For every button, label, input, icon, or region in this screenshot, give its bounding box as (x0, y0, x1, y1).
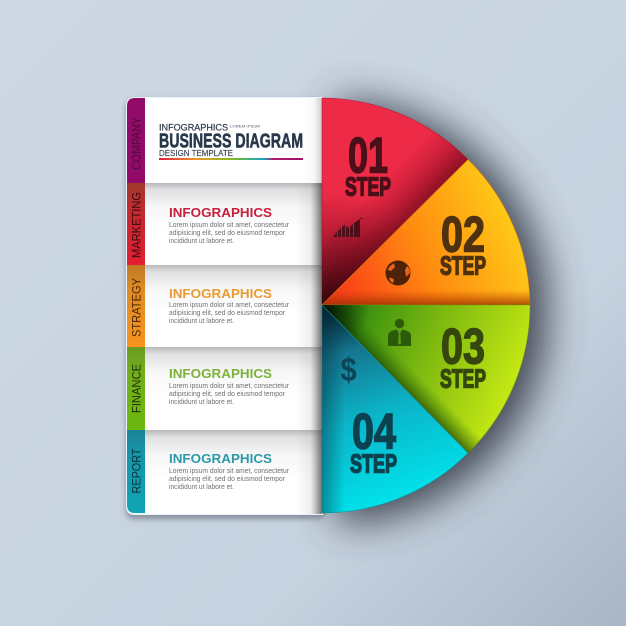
text: marketing block: adipisicing elit, sed do eiusmod tempor (169, 228, 286, 237)
label: 01 step: 01 (348, 128, 388, 184)
wedge: step 2 orange (322, 160, 530, 305)
text: report block: adipisicing elit, sed do eiusmod tempor (169, 474, 286, 483)
rainbow rule (159, 158, 303, 160)
label: 04 step: 04 (352, 404, 396, 460)
tab: company: COMPANY (130, 117, 144, 170)
label: 02 step (440, 206, 486, 280)
pie chart (322, 98, 530, 513)
tab: report: REPORT (130, 448, 144, 494)
panel frame (126, 97, 323, 515)
wedge: step 3 green (322, 305, 530, 453)
heading: infographics lorem ipsum: INFOGRAPHICS (159, 122, 228, 134)
text: strategy block (169, 286, 290, 325)
text: strategy block: incididunt ut labore et. (169, 316, 234, 325)
tab: marketing (127, 183, 145, 265)
label: 04 step: STEP (350, 448, 397, 478)
card: finance (127, 347, 322, 430)
wedge: step 1 red (322, 98, 468, 305)
text: report block: incididunt ut labore et. (169, 482, 234, 491)
wedge: step 4 cyan (322, 305, 468, 513)
label: 01 step: STEP (345, 172, 391, 202)
tab: marketing: MARKETING (130, 192, 144, 258)
card: report (127, 430, 322, 514)
text: finance block: incididunt ut labore et. (169, 397, 234, 406)
text: strategy block: adipisicing elit, sed do eiusmod tempor (169, 308, 286, 317)
tab: finance: FINANCE (130, 364, 144, 413)
text: marketing block: incididunt ut labore et. (169, 236, 234, 245)
label: 02 step: 02 (441, 206, 485, 262)
text: finance block: INFOGRAPHICS (169, 366, 272, 381)
label: 01 step (345, 128, 391, 202)
heading: business diagram: BUSINESS DIAGRAM (159, 130, 303, 152)
label: 04 step (350, 404, 397, 478)
text: strategy block: Lorem ipsum dolor sit amet, consectetur (169, 300, 290, 309)
text: marketing block: Lorem ipsum dolor sit amet, consectetur (169, 220, 290, 229)
label: 03 step: STEP (440, 364, 486, 394)
text: strategy block: INFOGRAPHICS (169, 286, 272, 301)
text: report block: Lorem ipsum dolor sit amet, consectetur (169, 466, 290, 475)
text: report block (169, 451, 290, 491)
icon: businessman (388, 319, 411, 346)
text: marketing block (169, 205, 290, 245)
heading: infographics lorem ipsum: LOREM IPSUM (230, 124, 260, 128)
panel: step list (126, 97, 323, 515)
icon: dollar sign: $ (340, 351, 357, 388)
text: marketing block: INFOGRAPHICS (169, 205, 272, 220)
tab: report (127, 430, 145, 513)
tab: strategy (127, 265, 145, 347)
icon: bar chart (333, 218, 362, 237)
text: finance block: adipisicing elit, sed do eiusmod tempor (169, 389, 286, 398)
card: company title (127, 98, 322, 183)
card: marketing (127, 183, 322, 265)
card: strategy (127, 265, 322, 347)
icon: globe (386, 260, 410, 286)
label: 03 step (440, 318, 486, 394)
text: finance block (169, 366, 290, 406)
text: report block: INFOGRAPHICS (169, 451, 272, 466)
pie drop shadow (336, 100, 548, 524)
text: finance block: Lorem ipsum dolor sit amet, consectetur (169, 381, 290, 390)
label: 02 step: STEP (440, 250, 486, 280)
heading: design template: DESIGN TEMPLATE (159, 148, 233, 158)
tab: strategy: STRATEGY (130, 278, 144, 337)
tab: finance (127, 347, 145, 430)
tab: company (127, 98, 145, 183)
panel drop shadow (126, 100, 326, 519)
label: 03 step: 03 (441, 318, 485, 374)
